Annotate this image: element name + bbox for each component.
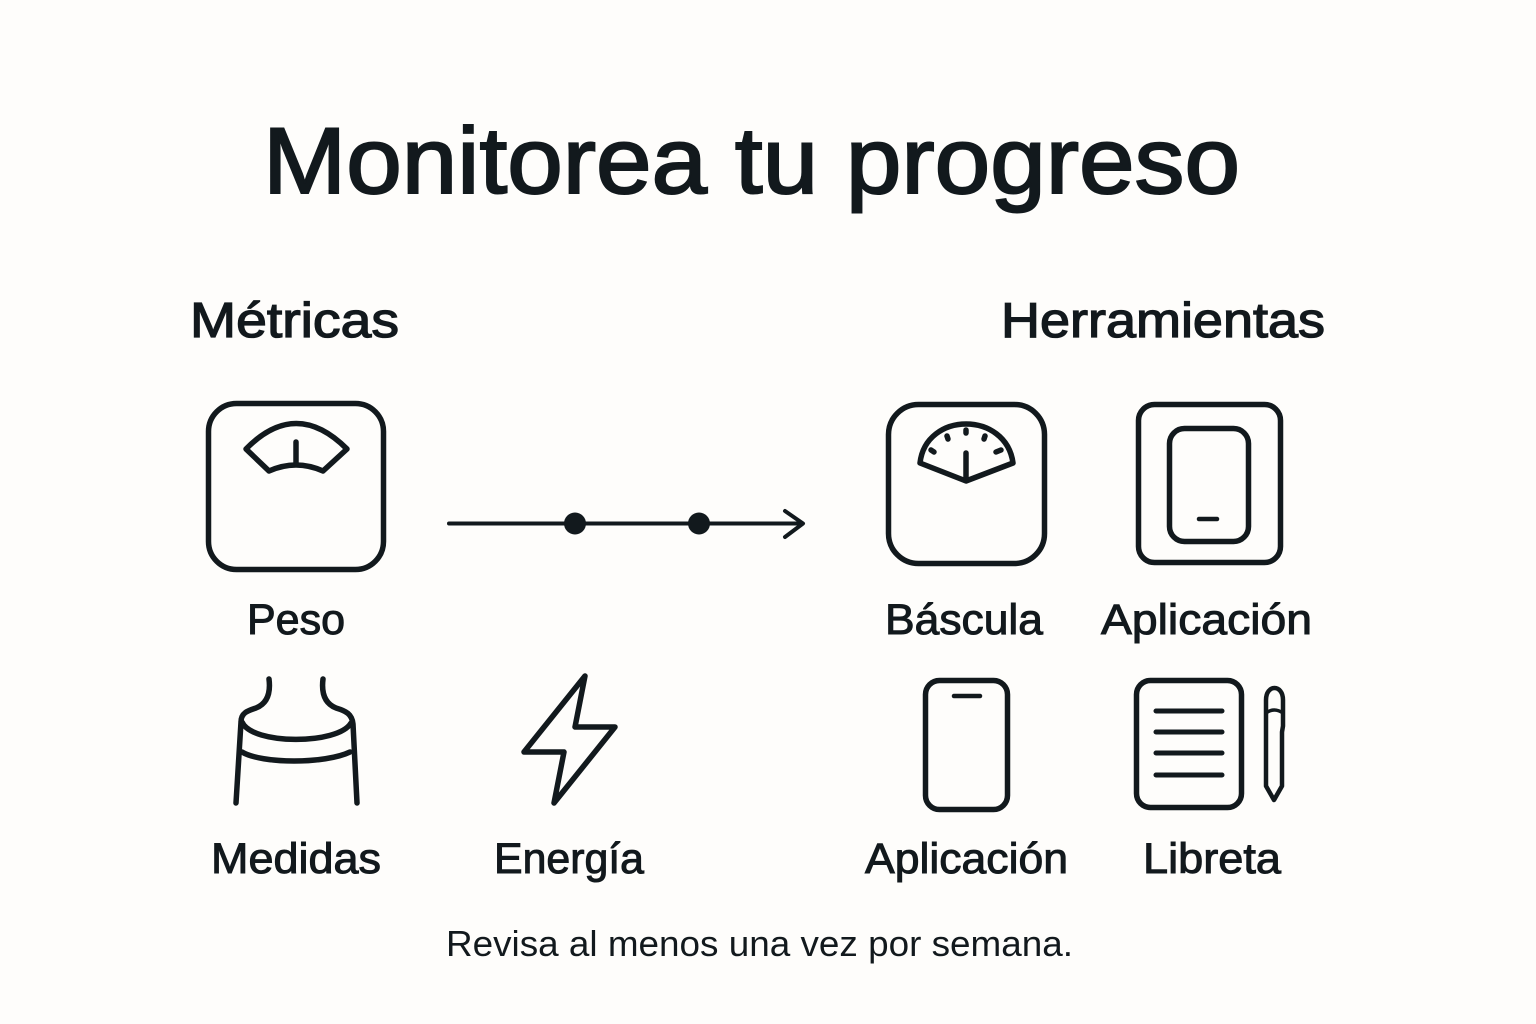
- label: medidas: Medidas: [211, 835, 381, 883]
- label: energía: Energía: [494, 835, 644, 883]
- label: libreta: Libreta: [1143, 835, 1281, 883]
- heading: métricas: Métricas: [190, 294, 399, 348]
- icon: phone: [926, 680, 1008, 810]
- label: báscula: Báscula: [885, 596, 1043, 644]
- icon: energy bolt: [524, 676, 615, 803]
- label: aplicación: Aplicación: [865, 835, 1068, 883]
- title: Monitorea tu progreso: [263, 108, 1240, 213]
- icon: weight scale: [208, 404, 384, 570]
- arrow: connector: [449, 511, 803, 537]
- panel: métricas: [190, 294, 644, 883]
- icon: notebook and pen: [1136, 680, 1283, 808]
- footer note: Revisa al menos una vez por semana.: [446, 923, 1073, 964]
- icon: body measurements: [236, 679, 357, 803]
- panel: herramientas: [865, 294, 1325, 883]
- label: peso: Peso: [247, 596, 345, 644]
- icon: dial scale: [888, 404, 1044, 564]
- icon: tablet app: [1138, 404, 1280, 562]
- heading: herramientas: Herramientas: [1001, 294, 1325, 348]
- label: aplicación: Aplicación: [1101, 596, 1312, 644]
